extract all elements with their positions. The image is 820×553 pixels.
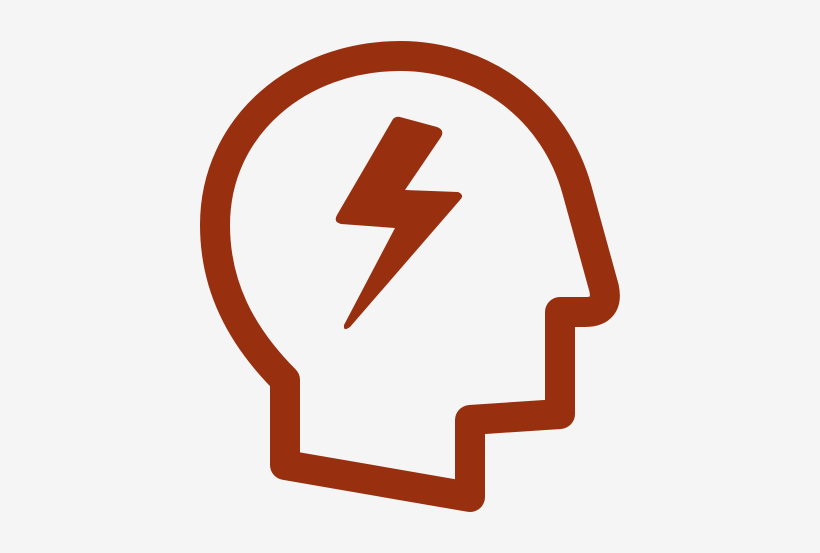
icon: head outline (215, 56, 605, 497)
icon: lightning bolt (336, 117, 462, 329)
